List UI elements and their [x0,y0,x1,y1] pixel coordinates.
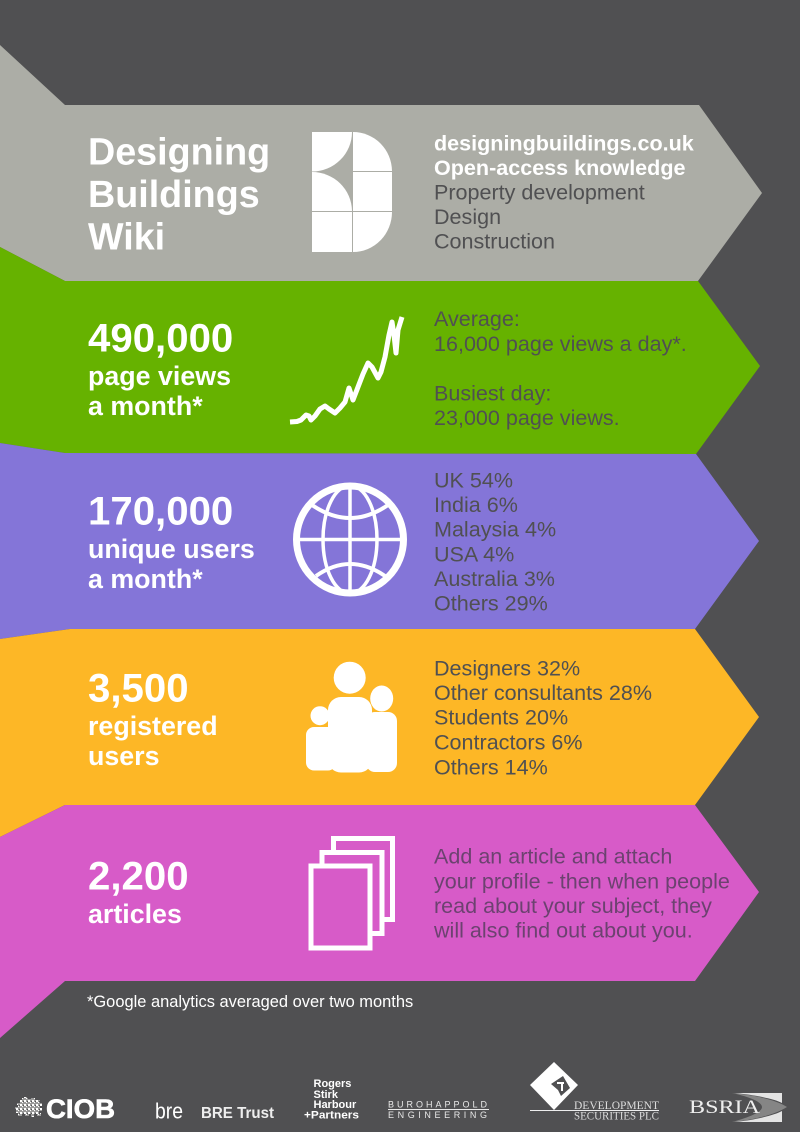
icon: group of people [306,662,397,772]
logo: Rogers Stirk Harbour + Partners: Stirk [314,1089,339,1101]
text: user types: Other consultants 28% [434,680,652,705]
panel: registered users [0,629,759,837]
text: users by country: Malaysia 4% [434,516,556,542]
text: user types: Others 14% [434,754,548,780]
heading: unique users stat: 170,000 [88,488,233,534]
text: average and busiest day [434,306,687,430]
text: site description: Construction [434,228,555,254]
heading: registered users stat: 3,500 [88,666,189,710]
logo: BSRIA: BSRIA [689,1098,761,1118]
logo: Rogers Stirk Harbour + Partners: Rogers [314,1078,351,1090]
logo: BuroHappold Engineering: BUROHAPPOLD [388,1100,488,1110]
logo: BuroHappold Engineering [388,1100,489,1120]
logo: Rogers Stirk Harbour + Partners [304,1078,359,1122]
title [88,130,270,258]
logo: BRE Trust: BRE Trust [201,1105,275,1122]
text: average and busiest day: 23,000 page views. [434,405,620,430]
text: users by country: India 6% [434,492,518,517]
text: users by country [434,468,556,616]
heading: articles stat [88,854,189,929]
text: users by country: Others 29% [434,590,548,616]
text: average and busiest day: Average: [434,306,520,331]
icon: CIOB crest [15,1097,42,1117]
icon: rising line chart [290,317,402,422]
logo: Rogers Stirk Harbour + Partners: +Partners [304,1110,359,1122]
heading: page views stat: 490,000 [88,316,233,360]
heading: unique users stat: unique users [88,534,255,564]
heading: unique users stat: a month* [88,564,203,594]
heading: unique users stat [88,488,255,594]
logo: BSRIA [689,1093,787,1122]
text: users by country: USA 4% [434,542,514,566]
panel: page views [0,247,760,454]
title: Wiki [88,216,165,258]
text: average and busiest day: 16,000 page views a day*. [434,331,687,356]
logo: CIOB [15,1094,115,1124]
logo: CIOB: CIOB [46,1094,115,1124]
text: add an article: your profile - then when people [434,868,730,894]
text: user types: Students 20% [434,704,568,730]
footnote: *Google analytics averaged over two months [87,993,413,1011]
heading: page views stat: page views [88,361,231,391]
panel: Designing Buildings Wiki intro [0,45,762,281]
text: site description: Open-access knowledge [434,155,685,180]
text: user types [434,656,652,780]
text: average and busiest day: Busiest day: [434,380,551,406]
heading: articles stat: articles [88,899,182,929]
text: add an article: Add an article and attach [434,844,672,868]
text: site description: Design [434,204,501,229]
heading: registered users stat [88,666,218,771]
icon: globe [296,485,404,594]
title: Designing [88,130,270,172]
text: add an article: read about your subject, they [434,893,712,918]
heading: articles stat: 2,200 [88,854,189,898]
heading: registered users stat: registered [88,711,218,741]
logo: Development Securities: DEVELOPMENT [574,1100,659,1112]
text: site description: designingbuildings.co.uk [434,130,694,156]
icon: Designing Buildings logo [312,132,392,252]
heading: registered users stat: users [88,741,160,771]
logo: Rogers Stirk Harbour + Partners: Harbour [314,1099,357,1111]
text: user types: Designers 32% [434,656,580,680]
title: Buildings [88,173,260,215]
text: users by country: UK 54% [434,468,513,492]
heading: page views stat: a month* [88,391,203,421]
panel: unique users [0,443,759,639]
text: site description [434,130,694,254]
text: user types: Contractors 6% [434,730,582,754]
logo: Development Securities: SECURITIES PLC [574,1110,659,1122]
logo: BuroHappold Engineering: ENGINEERING [388,1110,487,1120]
text: add an article: will also find out about you. [433,918,693,942]
logo: bre: bre [155,1098,183,1124]
panel: articles [0,805,759,1038]
heading: page views stat [88,316,233,421]
icon: stacked documents [311,838,392,948]
text: add an article [433,844,730,942]
text: users by country: Australia 3% [434,566,555,591]
logo: Development Securities [530,1062,659,1122]
text: site description: Property development [434,180,645,204]
